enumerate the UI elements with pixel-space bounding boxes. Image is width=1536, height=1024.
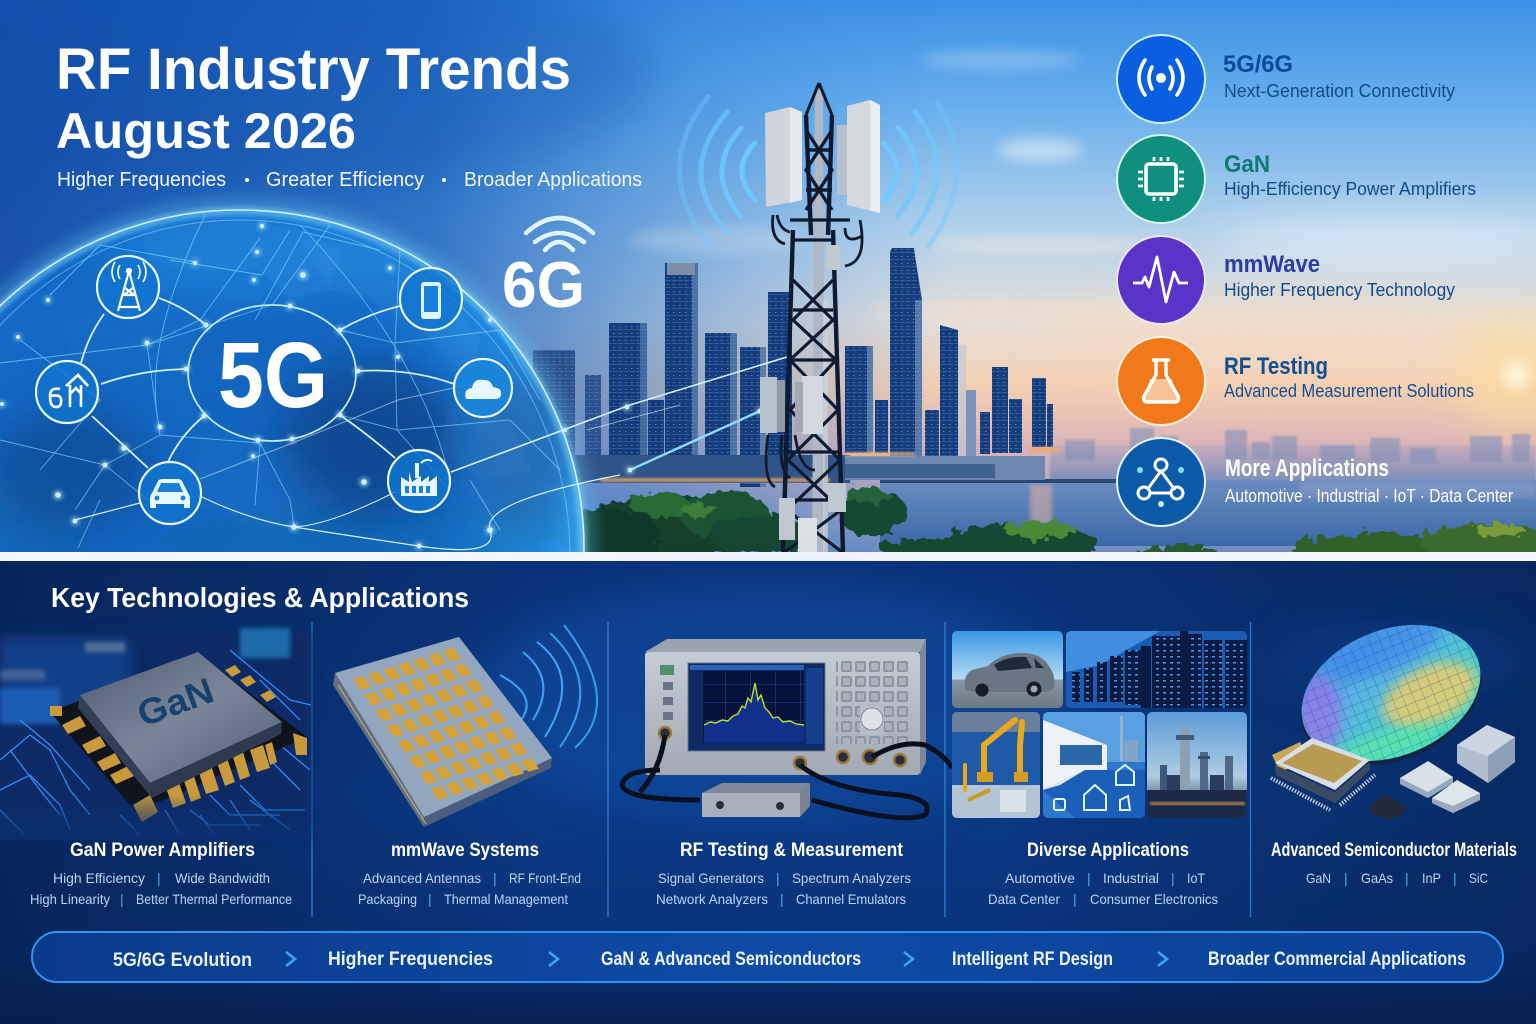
title block: RF Industry Trends — [56, 37, 571, 102]
subtitle row: Broader Applications — [464, 169, 642, 191]
card: Diverse Applications — [952, 631, 1247, 907]
sun glow — [1455, 315, 1536, 435]
arrow — [286, 952, 295, 966]
card: RF Testing & Measurement — [622, 639, 952, 907]
trend: RF Testing: RF Testing — [1224, 353, 1328, 380]
package body — [50, 655, 307, 812]
photo: industrial robot — [952, 712, 1040, 818]
card: mmWave Systems — [333, 625, 597, 907]
distant skyline — [1050, 428, 1536, 485]
card details: Network Analyzers — [656, 891, 768, 907]
card details: Better Thermal Performance — [136, 891, 292, 907]
card details: Channel Emulators — [796, 891, 906, 907]
icon: smartphone node — [400, 268, 462, 330]
network nodes — [0, 224, 762, 548]
card details: Advanced Antennas — [363, 870, 481, 886]
card details: | — [780, 891, 784, 907]
subtitle row: Greater Efficiency — [266, 169, 424, 191]
card details: Thermal Management — [444, 891, 568, 907]
card details: SiC — [1469, 870, 1488, 886]
panel: trend list — [1117, 35, 1513, 526]
subtitle row — [57, 169, 642, 191]
trend: 5G/6G: 5G/6G — [1223, 51, 1293, 78]
card details: High Efficiency — [53, 870, 145, 886]
card details: Consumer Electronics — [1090, 891, 1218, 907]
trees — [0, 483, 1536, 552]
trend: mmWave — [1117, 236, 1455, 324]
card details: | — [1171, 870, 1175, 886]
roadmap pill: 5G/6G Evolution — [113, 950, 252, 971]
card details — [358, 870, 581, 907]
card details — [988, 870, 1218, 907]
trend: GaN — [1117, 135, 1476, 223]
test cables — [622, 735, 952, 818]
signal arcs around tower — [679, 97, 957, 247]
roadmap pill — [32, 932, 1503, 982]
card details — [1306, 870, 1488, 886]
column dividers — [312, 622, 1250, 917]
photo: data center — [1066, 631, 1247, 708]
card details: | — [776, 870, 780, 886]
photo: automotive — [952, 631, 1063, 708]
globe texture — [0, 215, 570, 548]
network connection lines — [75, 298, 787, 550]
card details: | — [157, 870, 161, 886]
globe rim — [0, 205, 590, 552]
card details: | — [1344, 870, 1348, 886]
roadmap pill: GaN & Advanced Semiconductors — [601, 949, 861, 970]
telecom tower — [760, 83, 880, 552]
icon: cell tower node — [97, 256, 159, 318]
trend: 5G/6G — [1117, 35, 1455, 123]
icon: smart home node — [36, 361, 98, 423]
title block — [56, 37, 571, 159]
section heading: Key Technologies & Applications — [51, 582, 469, 613]
image: mmWave antenna array — [333, 625, 597, 827]
trend: More Applications — [1117, 438, 1513, 526]
roadmap pill: Higher Frequencies — [328, 949, 493, 970]
card details: | — [1087, 870, 1091, 886]
trend: RF Testing: Advanced Measurement Solutions — [1224, 381, 1474, 401]
water — [880, 480, 1536, 546]
arrow — [549, 952, 558, 966]
roadmap pill: Broader Commercial Applications — [1208, 949, 1466, 970]
image: GaN chip on PCB: GaN — [132, 669, 219, 735]
card title: mmWave Systems — [391, 840, 539, 861]
card details: Wide Bandwidth — [175, 870, 270, 886]
card details: | — [120, 891, 124, 907]
5G label: 5G — [218, 323, 328, 427]
city buildings — [530, 248, 1058, 487]
icon: cloud node — [454, 359, 512, 417]
card title: Diverse Applications — [1027, 840, 1189, 861]
card details: Signal Generators — [658, 870, 764, 886]
card details: | — [428, 891, 432, 907]
card details: | — [1073, 891, 1077, 907]
gold pins — [50, 665, 307, 822]
bottom section: key technologies — [0, 561, 1536, 1024]
trend: RF Testing — [1117, 337, 1474, 425]
card title: GaN Power Amplifiers — [70, 840, 255, 861]
card details: IoT — [1187, 870, 1205, 886]
card title: RF Testing & Measurement — [680, 840, 904, 861]
image: spectrum analyzer — [622, 639, 952, 818]
card details: | — [493, 870, 497, 886]
card: GaN Power Amplifiers — [0, 628, 311, 907]
title block: August 2026 — [56, 103, 356, 159]
card details: Data Center — [988, 891, 1060, 907]
photo: smart home — [1043, 712, 1145, 818]
card details: | — [1405, 870, 1409, 886]
icon: car node — [139, 462, 201, 524]
subtitle row: Higher Frequencies — [57, 169, 226, 191]
central 5G ring — [188, 305, 356, 441]
trend: mmWave: mmWave — [1224, 251, 1320, 278]
card details: | — [1453, 870, 1457, 886]
hero panel: sky, city and tower — [0, 0, 1536, 566]
arrow — [1158, 952, 1167, 966]
image: wafer and materials — [1270, 625, 1515, 820]
6G badge: 6G — [502, 248, 585, 321]
card details: GaAs — [1361, 870, 1393, 886]
trend: 5G/6G: Next-Generation Connectivity — [1224, 81, 1455, 101]
card details: Packaging — [358, 891, 417, 907]
arrow — [904, 952, 913, 966]
trend: GaN: GaN — [1224, 151, 1270, 178]
card details: Automotive — [1005, 870, 1075, 886]
card details: High Linearity — [30, 891, 110, 907]
trend: More Applications: More Applications — [1225, 455, 1389, 482]
card: Advanced Semiconductor Materials — [1271, 600, 1517, 886]
roadmap pill: Intelligent RF Design — [952, 949, 1113, 970]
icon: factory node — [388, 450, 450, 512]
card details — [30, 870, 292, 907]
white divider band — [0, 552, 1536, 561]
6G badge — [504, 216, 596, 308]
card details: Industrial — [1103, 870, 1159, 886]
card details: Spectrum Analyzers — [792, 870, 911, 886]
photo: petrochemical plant — [1147, 712, 1247, 818]
trend: mmWave: Higher Frequency Technology — [1224, 280, 1455, 300]
globe with 5G network — [0, 193, 787, 552]
image: GaN chip on PCB — [0, 628, 311, 840]
card details: InP — [1422, 870, 1441, 886]
card details — [656, 870, 911, 907]
card details: GaN — [1306, 870, 1331, 886]
trend: GaN: High-Efficiency Power Amplifiers — [1224, 179, 1476, 199]
card details: RF Front-End — [509, 870, 581, 886]
